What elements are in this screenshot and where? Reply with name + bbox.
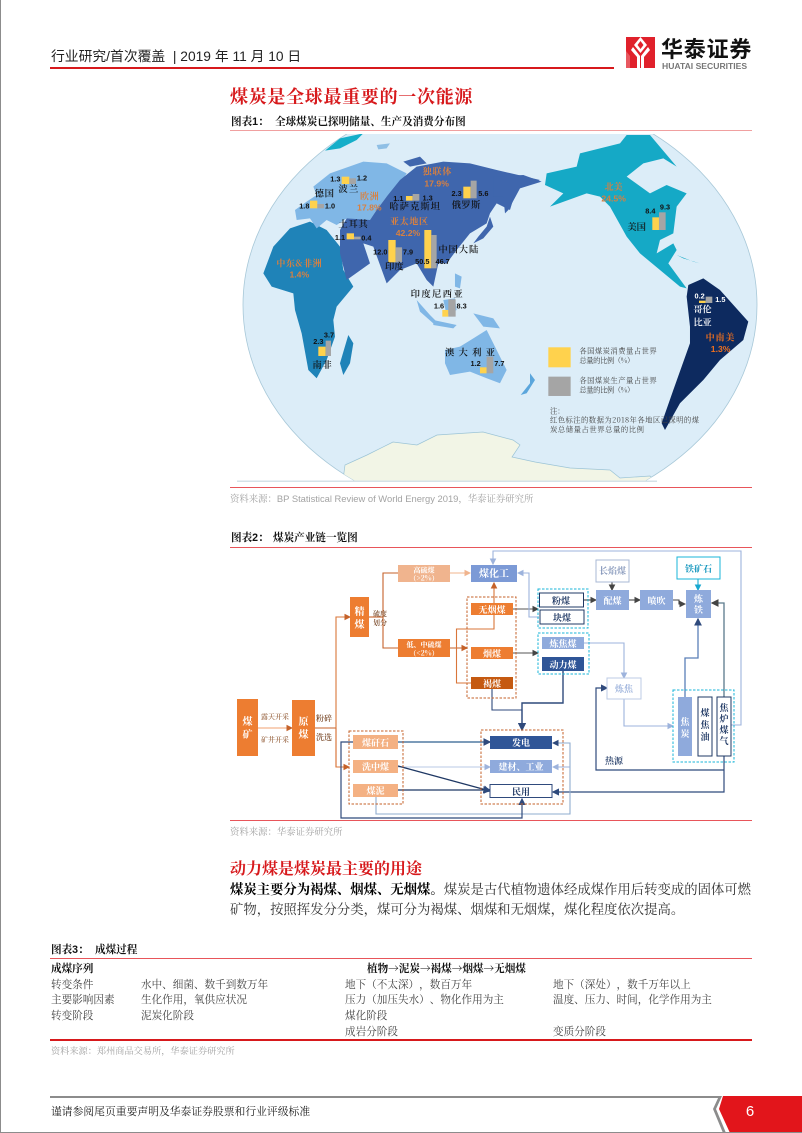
box: coal slurry: 煤泥 (365, 784, 385, 797)
new zealand (521, 373, 535, 395)
box: power: 发电 (512, 736, 530, 749)
box: bituminous (471, 647, 513, 660)
numbers: 5.6 (478, 189, 488, 198)
bars (310, 177, 493, 373)
box: ironmaking (686, 590, 711, 618)
numbers: 1.3 (330, 174, 340, 183)
process labels: 洗选 (316, 732, 332, 743)
box: building materials: 建材、工业 (498, 760, 544, 773)
process labels: 露天开采 (261, 712, 289, 722)
source note 3: 资料来源：郑州商品交易所，华泰证券研究所 (51, 1046, 235, 1056)
process labels: 热源 (605, 754, 624, 767)
logo: Huatai Securities: HUATAI SECURITIES (662, 61, 747, 71)
process labels (261, 609, 624, 767)
country names: 中国大陆 (438, 241, 479, 255)
numbers: 1.1 (335, 233, 345, 242)
box: injection (640, 590, 673, 610)
footer rule (50, 1096, 720, 1098)
table: coal formation process: 成煤序列 (51, 961, 93, 976)
table: coal formation process: 主要影响因素 (51, 992, 115, 1007)
box: high sulfur coal (398, 565, 450, 584)
numbers: 7.9 (403, 248, 413, 257)
process labels: 粉碎 (316, 713, 333, 724)
table: coal formation process: 生化作用，氧供应状况 (141, 992, 247, 1007)
numbers: 3.7 (324, 330, 334, 339)
page edge (0, 0, 1, 1133)
south america (662, 278, 748, 430)
usa and colombia bars (652, 212, 712, 303)
legend: 总量的比例（%） (579, 385, 634, 395)
americas text: 9.3 (660, 203, 670, 212)
legend: 炭总储量占世界总量的比例 (550, 425, 644, 435)
table: coal formation process: 地下（不太深），数百万年 (345, 977, 472, 992)
box: gangue (353, 735, 398, 749)
far east asia edge (504, 175, 542, 214)
box: coking (607, 678, 641, 699)
americas text: 北美 (605, 180, 623, 193)
box: coal slurry (353, 784, 398, 797)
australia (445, 330, 507, 383)
americas text: 0.2 (695, 292, 705, 301)
table: coal formation process: 泥炭化阶段 (141, 1008, 194, 1023)
region shares: 中东&非洲 (276, 256, 322, 269)
table: coal formation process: 成岩分阶段 (345, 1024, 398, 1039)
box: anthracite (471, 603, 513, 616)
box: injection: 喷吹 (647, 594, 666, 607)
box: coal tar: 焦 (700, 718, 710, 731)
north america (545, 135, 687, 288)
box: civil (490, 784, 552, 798)
box: lump: 块煤 (553, 611, 571, 624)
body paragraph: 煤炭主要分为褐煤、烟煤、无烟煤。煤炭是古代植物遗体经成煤作用后转变成的固体可燃 (230, 882, 751, 897)
body paragraph: 矿物，按照挥发分分类，煤可分为褐煤、烟煤和无烟煤，煤化程度依次提高。 (230, 902, 684, 917)
source note 1: 资料来源：BP Statistical Review of World Energy 2019，华泰证券研究所 (230, 493, 533, 504)
continents in zoom-one coordinates (263, 133, 540, 383)
greenland sliver (325, 133, 363, 151)
table: coal formation process (51, 961, 712, 1039)
box: coke oven gas: 焦 (719, 701, 729, 714)
numbers: 2.3 (313, 337, 323, 346)
box: coke oven gas: 煤 (718, 723, 729, 736)
numbers: 1.8 (299, 201, 309, 210)
asia (340, 162, 540, 287)
box: high sulfur coal: 高硫煤 (414, 566, 434, 576)
map labels americas and legend (548, 180, 734, 435)
process labels: 划分 (373, 618, 387, 628)
numbers: 46.7 (436, 257, 450, 266)
box: clean coal: 精 (354, 603, 364, 618)
table: coal formation process: 植物→泥炭→褐煤→烟煤→无烟煤 (367, 961, 526, 976)
table: coal formation process: 温度、压力、时间，化学作用为主 (553, 992, 712, 1007)
body paragraph (230, 882, 751, 917)
box: coke (678, 697, 692, 756)
region shares: 亚太地区 (390, 214, 428, 227)
box: raw coal (292, 700, 315, 756)
region shares: 独联体 (423, 164, 451, 177)
southeast asia islands (416, 300, 436, 324)
region shares: 17.9% (424, 179, 449, 189)
box: clean coal (350, 597, 369, 637)
box: coal tar: 煤 (699, 706, 710, 719)
box: civil: 民用 (512, 785, 530, 798)
box: raw coal: 原 (298, 713, 310, 728)
legend: 各国煤炭生产量占世界 (579, 376, 657, 386)
world map chart (237, 134, 758, 482)
africa (263, 222, 353, 378)
box: lump (540, 610, 584, 624)
americas text: 1.3% (711, 344, 731, 354)
box: blending (596, 590, 629, 610)
process labels: 硫度 (373, 609, 387, 619)
box: ironmaking: 铁 (694, 603, 703, 616)
legend: 总量的比例（%） (579, 356, 634, 366)
table: coal formation process: 转变阶段 (51, 1008, 93, 1023)
box: raw coal: 煤 (298, 726, 308, 741)
table: coal formation process: 煤化阶段 (345, 1008, 387, 1023)
antarctica (343, 432, 655, 481)
numbers: 1.6 (434, 301, 444, 310)
country names (312, 181, 496, 371)
arrows: blue process paths (341, 551, 741, 818)
box: coking coal (542, 637, 584, 650)
box: coal mine (237, 699, 258, 756)
table: coal formation process: 地下（深处），数千万年以上 (553, 977, 691, 992)
box: clean coal: 煤 (354, 616, 364, 631)
numbers (299, 174, 504, 368)
country names: 哈萨克斯坦 (389, 198, 441, 212)
box: middlings (353, 760, 398, 773)
footer text: 谨请参阅尾页重要声明及华泰证券股票和行业评级标准 (51, 1106, 310, 1118)
numbers: 1.2 (471, 359, 481, 368)
americas text: 24.5% (601, 193, 626, 203)
box: coal mine: 煤 (242, 713, 252, 728)
caption: figure 2: 图表2： (231, 532, 269, 544)
box: coke oven gas (717, 697, 731, 756)
country names: 波兰 (338, 181, 358, 195)
box: high sulfur coal: （>2%） (409, 574, 439, 584)
box: coke oven gas: 气 (719, 734, 729, 747)
box: coke: 炭 (680, 727, 690, 740)
box: iron ore (677, 557, 720, 579)
numbers: 1.3 (423, 194, 433, 203)
legend: 注： (550, 407, 565, 417)
legend: 红色标注的数据为2018年各地区已探明的煤 (550, 415, 700, 425)
caption: figure 3: 成煤过程 (95, 944, 137, 956)
numbers: 2.3 (452, 189, 462, 198)
country names: 俄罗斯 (452, 197, 481, 211)
americas text: 中南美 (706, 331, 734, 344)
table: coal formation process: 变质分阶段 (553, 1024, 606, 1039)
header text: 行业研究/首次覆盖 | 2019 年 11 月 10 日 (51, 49, 301, 64)
table: coal formation process: 压力（加压失水）、物化作用为主 (345, 992, 504, 1007)
legend (548, 347, 700, 435)
table: coal formation process: 转变条件 (51, 977, 93, 992)
arrows: orange coal paths (258, 573, 494, 767)
caption: figure 1: 图表1： (231, 116, 269, 128)
caption: figure 3: 图表3： (51, 944, 89, 956)
box: thermal coal: 动力煤 (549, 658, 577, 671)
box: blending: 配煤 (603, 594, 622, 607)
region shares: 17.8% (357, 203, 382, 213)
numbers: 0.4 (361, 233, 372, 242)
numbers: 8.3 (457, 302, 467, 311)
country names: 澳大利亚 (445, 345, 496, 359)
country names: 南非 (312, 357, 332, 371)
box: coal tar (698, 697, 712, 756)
caption: figure 2: 煤炭产业链一览图 (273, 532, 358, 544)
region shares: 1.4% (289, 269, 309, 279)
box: lignite (471, 677, 513, 690)
region shares: 欧洲 (360, 189, 379, 202)
box: lignite: 褐煤 (483, 677, 501, 690)
box: middlings: 洗中煤 (362, 760, 389, 773)
numbers: 7.7 (494, 359, 504, 368)
dashed groups (349, 589, 734, 804)
americas text: 8.4 (645, 207, 656, 216)
page number tab (713, 1096, 802, 1132)
numbers: 50.5 (415, 257, 429, 266)
box: long flame coal (596, 560, 629, 582)
box: coal chemical: 煤化工 (478, 565, 509, 580)
map labels europe asia africa (276, 164, 504, 373)
logo: Huatai Securities (626, 37, 752, 71)
box: iron ore: 铁矿石 (685, 562, 712, 575)
box: coking: 炼焦 (614, 682, 634, 695)
country names: 印度尼西亚 (411, 286, 463, 300)
americas text: 1.5 (715, 295, 725, 304)
europe (295, 162, 407, 228)
country names: 印度 (385, 259, 404, 273)
box: gangue: 煤矸石 (361, 736, 389, 749)
numbers: 12.0 (373, 248, 387, 257)
box: ironmaking: 炼 (693, 592, 704, 605)
box: long flame coal: 长焰煤 (599, 564, 626, 577)
box: low sulfur coal (398, 639, 450, 658)
heading: thermal coal: 动力煤是煤炭最主要的用途 (230, 861, 422, 878)
region shares: 42.2% (396, 228, 421, 238)
box: anthracite: 无烟煤 (478, 603, 506, 616)
heading: coal is primary energy: 煤炭是全球最重要的一次能源 (230, 87, 473, 107)
table: coal formation process: 水中、细菌、数千到数万年 (141, 977, 268, 992)
numbers: 1.2 (357, 174, 367, 183)
numbers: 1.0 (325, 201, 335, 210)
caption: figure 3 (51, 944, 138, 956)
legend: 各国煤炭消费量占世界 (579, 347, 657, 357)
country names: 德国 (315, 186, 334, 200)
box: coal chemical (471, 565, 517, 582)
americas text: 哥伦 (693, 301, 712, 315)
box: coal tar: 油 (700, 730, 710, 743)
source note 2: 资料来源：华泰证券研究所 (230, 826, 343, 837)
box: bituminous: 烟煤 (482, 647, 501, 660)
box: pulverized: 粉煤 (552, 594, 570, 607)
americas text (601, 180, 734, 354)
box: coal mine: 矿 (242, 726, 252, 741)
americas text: 比亚 (693, 315, 712, 329)
box: coke: 焦 (680, 715, 690, 728)
flow chart: coal industry chain (237, 550, 742, 819)
box: coking coal: 炼焦煤 (548, 637, 577, 650)
box: coke oven gas: 炉 (718, 712, 729, 725)
box: pulverized (540, 593, 584, 607)
caption: figure 1: 全球煤炭已探明储量、生产及消费分布图 (275, 116, 466, 128)
box: low sulfur coal: （<2%） (409, 648, 439, 658)
numbers: 1.1 (393, 194, 403, 203)
header rule (50, 67, 614, 69)
americas text: 美国 (627, 219, 646, 233)
page number tab: 6 (746, 1103, 754, 1120)
box: low sulfur coal: 低、中硫煤 (406, 640, 442, 650)
country names: 土耳其 (338, 216, 369, 230)
process labels: 矿井开采 (261, 735, 289, 745)
box: power (490, 736, 552, 749)
ocean globe (242, 134, 758, 480)
box: thermal coal (542, 657, 584, 671)
logo: Huatai Securities: 华泰证券 (661, 37, 752, 62)
region shares (276, 164, 451, 279)
caption: figure 2 (231, 532, 358, 544)
